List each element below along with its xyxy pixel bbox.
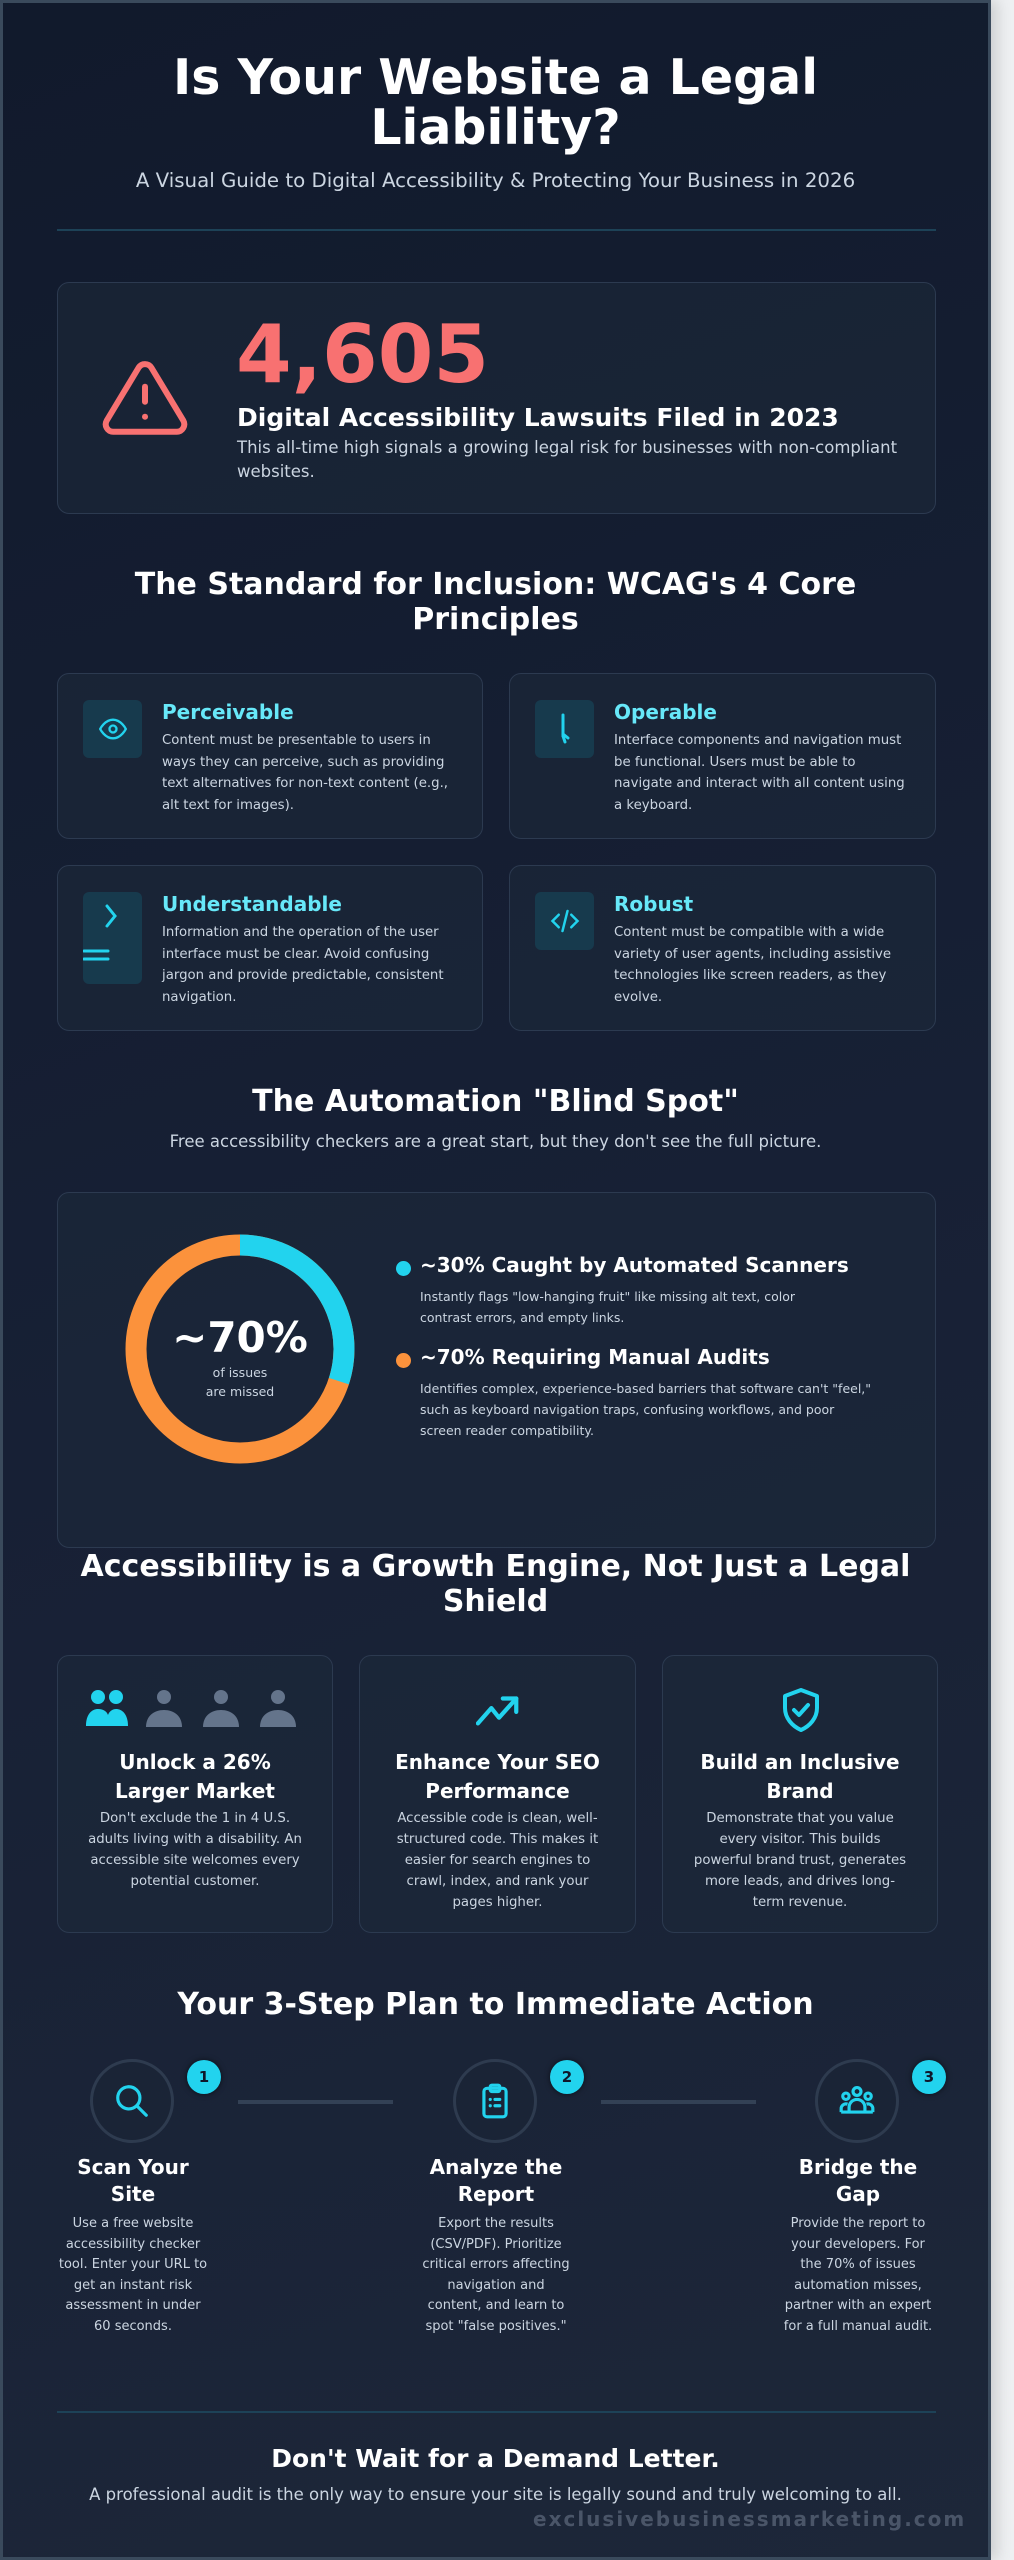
panel: perceivable xyxy=(57,673,483,839)
connector arrows xyxy=(238,2100,393,2104)
heading: growth: Accessibility is a Growth Engine, Not Just a Legal xyxy=(81,1549,910,1584)
big number: 4,605 xyxy=(236,308,489,401)
step 3: Gap xyxy=(836,2182,880,2206)
icon: trend xyxy=(476,1696,518,1726)
step 1: Site xyxy=(111,2182,155,2206)
panel: robust xyxy=(509,865,936,1031)
panel: larger market xyxy=(57,1655,333,1933)
panel: understandable: Information and the operation of the user interface must be clear. Avoid confusing jargon and provide predictable, consistent navigation. xyxy=(162,925,444,1004)
donut chart xyxy=(126,1234,354,1464)
subtitle: A Visual Guide to Digital Accessibility & Protecting Your Business in 2026 xyxy=(136,169,855,192)
panel: larger market: Unlock a 26% xyxy=(119,1750,271,1774)
icon: team xyxy=(815,2059,899,2143)
icon: chevron and lines xyxy=(83,892,142,984)
icon: clipboard xyxy=(453,2059,537,2143)
closing text: A professional audit is the only way to ensure your site is legally sound and truly welcoming to all. xyxy=(89,2485,902,2504)
title xyxy=(173,49,818,156)
panel: inclusive brand: Build an Inclusive xyxy=(700,1750,900,1774)
closing heading: Don't Wait for a Demand Letter. xyxy=(271,2444,720,2473)
icon: people xyxy=(86,1690,296,1727)
icon: search xyxy=(90,2059,174,2143)
panel: donut chart: ~70% Requiring Manual Audits xyxy=(420,1345,770,1369)
step 3 xyxy=(784,2058,948,2334)
watermark: exclusivebusinessmarketing.com xyxy=(533,2507,966,2531)
subtitle: blind spot: Free accessibility checkers are a great start, but they don't see the full picture. xyxy=(170,1132,821,1151)
panel: robust: Content must be compatible with a wide variety of user agents, including assistive technologies like screen readers, as they evolve. xyxy=(614,925,891,1004)
icon: code xyxy=(535,892,594,950)
icon: shield xyxy=(783,1688,819,1732)
panel: inclusive brand: Brand xyxy=(766,1779,834,1803)
panel: inclusive brand xyxy=(662,1655,938,1933)
step 3: Bridge the xyxy=(799,2155,917,2179)
step 1: 1 xyxy=(199,2068,209,2086)
step 2 xyxy=(422,2058,586,2334)
donut chart: of issues xyxy=(213,1365,267,1380)
heading: WCAG: Principles xyxy=(412,602,579,637)
heading: 3-step plan: Your 3-Step Plan to Immediate Action xyxy=(177,1987,814,2022)
panel: inclusive brand: Demonstrate that you value every visitor. This builds powerful brand trust, generates more leads, and drives long-term revenue. xyxy=(694,1811,906,1910)
title: Is Your Website a Legal xyxy=(173,49,818,106)
donut chart: ~70% xyxy=(172,1313,308,1362)
step 1: Scan Your xyxy=(77,2155,189,2179)
legend: automated xyxy=(396,1253,849,1325)
stat description: This all-time high signals a growing legal risk for businesses with non-compliant websites. xyxy=(237,438,897,481)
panel: understandable: Understandable xyxy=(162,892,342,916)
panel: SEO: Performance xyxy=(425,1779,570,1803)
panel: operable xyxy=(509,673,936,839)
panel: understandable xyxy=(57,865,483,1031)
panel: robust: Robust xyxy=(614,892,693,916)
panel: SEO xyxy=(359,1655,636,1933)
step 3: Provide the report to your developers. For the 70% of issues automation misses, partner with an expert for a full manual audit. xyxy=(784,2216,932,2334)
step 2: 2 xyxy=(562,2068,572,2086)
step 2: Analyze the xyxy=(430,2155,562,2179)
donut chart: are missed xyxy=(206,1384,274,1399)
icon: eye xyxy=(83,700,142,758)
heading: WCAG: The Standard for Inclusion: WCAG's 4 Core xyxy=(135,567,856,602)
panel: perceivable: Perceivable xyxy=(162,700,294,724)
panel: SEO: Enhance Your SEO xyxy=(395,1750,600,1774)
panel: donut chart: Identifies complex, experience-based barriers that software can't "feel," such as keyboard navigation traps, confusing workflows, and poor screen reader compatibility. xyxy=(420,1381,871,1438)
icon: pointer xyxy=(535,700,594,758)
legend: manual xyxy=(396,1345,871,1438)
panel: operable: Interface components and navigation must be functional. Users must be able to navigate and interact with all content using a keyboard. xyxy=(614,733,905,812)
panel: donut chart: ~30% Caught by Automated Scanners xyxy=(420,1253,849,1277)
step 2: Report xyxy=(458,2182,534,2206)
icon: warning xyxy=(102,361,188,435)
step 2: Export the results (CSV/PDF). Prioritize critical errors affecting navigation and content, and learn to spot "false positives." xyxy=(422,2216,570,2334)
title: Liability? xyxy=(370,99,621,156)
step 1: Use a free website accessibility checker tool. Enter your URL to get an instant risk assessment in under 60 seconds. xyxy=(59,2216,207,2334)
panel: perceivable: Content must be presentable to users in ways they can perceive, such as providing text alternatives for non-text content (e.g., alt text for images). xyxy=(162,733,448,812)
panel: larger market: Larger Market xyxy=(115,1779,275,1803)
panel: donut chart xyxy=(57,1192,936,1548)
stat label: Digital Accessibility Lawsuits Filed in 2023 xyxy=(237,403,839,432)
heading: WCAG xyxy=(134,567,856,637)
step 3: 3 xyxy=(924,2068,934,2086)
panel: SEO: Accessible code is clean, well-structured code. This makes it easier for search engines to crawl, index, and rank your pages higher. xyxy=(397,1811,598,1910)
heading: growth xyxy=(80,1549,910,1619)
panel: operable: Operable xyxy=(614,700,717,724)
panel: donut chart: Instantly flags "low-hanging fruit" like missing alt text, color contrast errors, and empty links. xyxy=(420,1289,795,1325)
panel: larger market: Don't exclude the 1 in 4 U.S. adults living with a disability. An accessible site welcomes every potential customer. xyxy=(88,1811,302,1889)
step 1 xyxy=(59,2058,222,2334)
stat card xyxy=(57,282,936,514)
heading: blind spot: The Automation "Blind Spot" xyxy=(252,1084,739,1119)
heading: growth: Shield xyxy=(443,1584,548,1619)
